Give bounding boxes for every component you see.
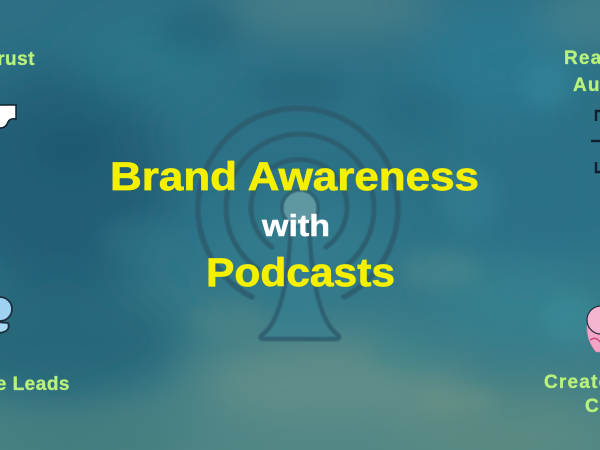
icon: blue figure [0,297,12,333]
label: Reach New Audience [564,48,600,96]
label: Create Engaging Content [544,372,600,417]
icon: thumbs up [0,105,16,128]
subtitle: with: with [261,208,330,243]
title: Podcasts: Podcasts [206,251,395,295]
title: Brand Awareness: Brand Awareness [110,155,479,199]
icon: target brackets [591,111,600,172]
icon: podcast antenna watermark [198,108,398,339]
icon: pink brain [587,306,600,352]
